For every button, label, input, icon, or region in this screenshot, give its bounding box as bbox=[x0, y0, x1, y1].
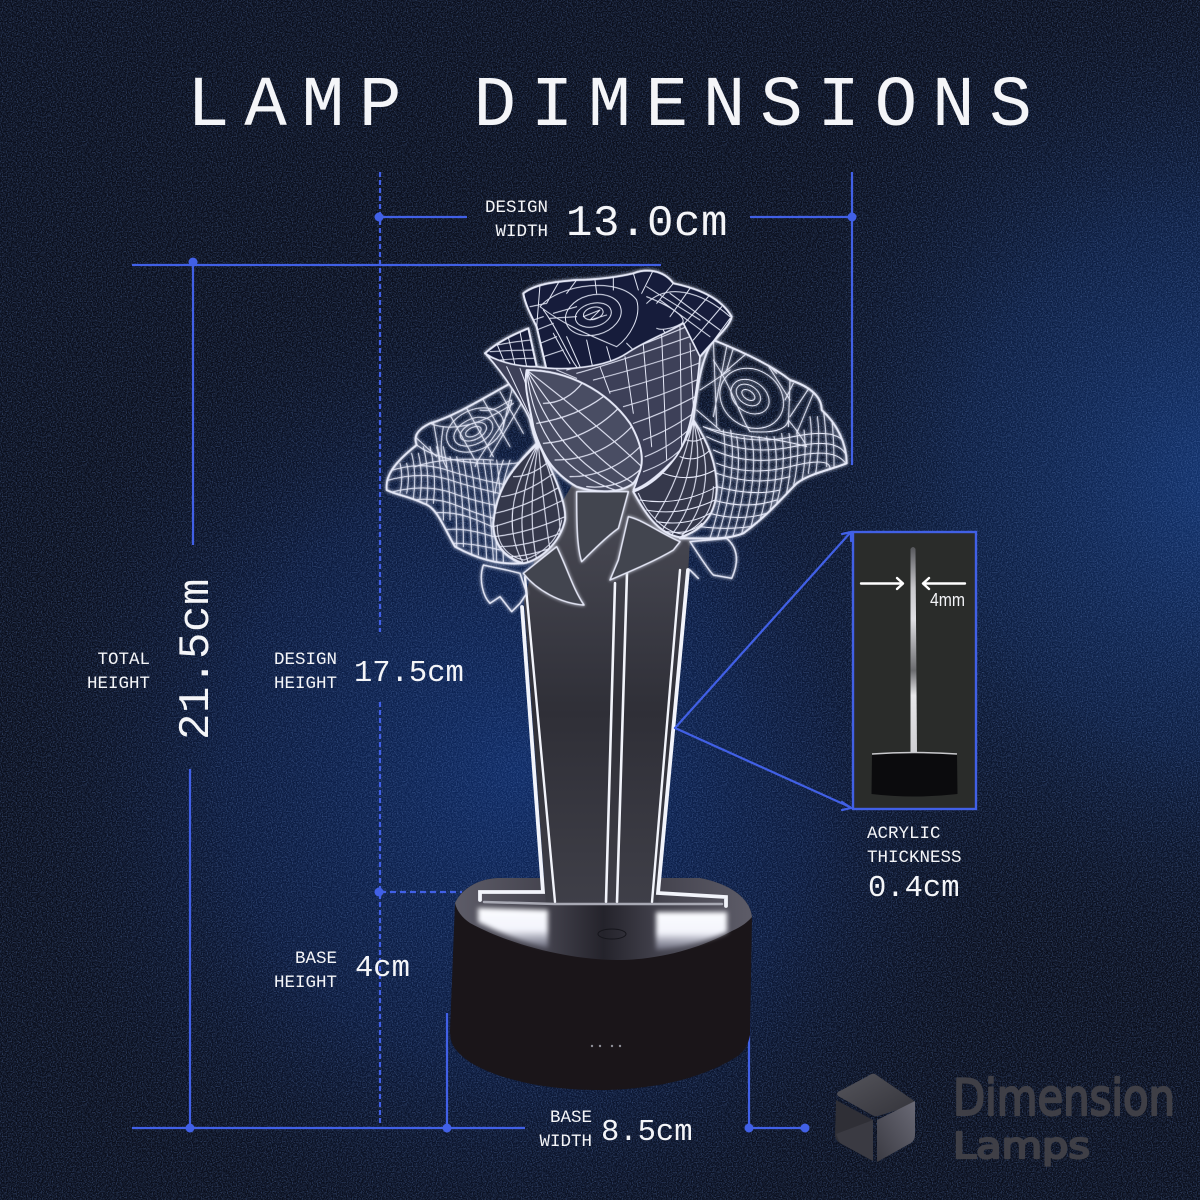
dimension label: base width: BASE bbox=[550, 1108, 592, 1128]
dimension lines bbox=[132, 172, 856, 1132]
dimension label: total height: 21.5cm bbox=[172, 578, 222, 740]
dimension label: design height bbox=[274, 650, 464, 694]
callout arrows to inset bbox=[675, 532, 851, 810]
dimension label: design width: DESIGN bbox=[485, 198, 548, 218]
dimension label: acrylic thickness: 0.4cm bbox=[868, 872, 960, 906]
logo cube icon bbox=[835, 1074, 915, 1162]
thickness value: 4mm bbox=[930, 590, 965, 610]
dimension label: design width: WIDTH bbox=[495, 222, 548, 242]
inset: acrylic side view bbox=[853, 532, 976, 809]
top rose petals bbox=[485, 270, 732, 373]
dimension label: base height: 4cm bbox=[355, 952, 410, 986]
dimension label: base width: WIDTH bbox=[539, 1132, 592, 1152]
rose cup bbox=[487, 323, 700, 490]
dimension label: design height: DESIGN bbox=[274, 650, 337, 670]
logo wordmark bbox=[953, 1069, 1175, 1167]
dimension label: base width bbox=[539, 1108, 693, 1152]
dimension label: design height: 17.5cm bbox=[354, 657, 464, 691]
dimension label: base height: BASE bbox=[295, 949, 337, 969]
lamp base bbox=[450, 878, 752, 1090]
dimension label: total height: TOTAL bbox=[97, 650, 150, 670]
right rose bbox=[680, 340, 847, 539]
dimension label: base width: 8.5cm bbox=[601, 1116, 693, 1150]
dimension label: design width bbox=[485, 198, 728, 249]
acrylic stem panel bbox=[480, 480, 726, 906]
dimension label: total height bbox=[87, 578, 222, 740]
title: LAMP DIMENSIONS bbox=[187, 67, 1047, 147]
dimension label: design height: HEIGHT bbox=[274, 674, 337, 694]
left bud bbox=[493, 443, 565, 563]
roses wireframe bbox=[383, 270, 847, 612]
left rose bbox=[383, 382, 537, 564]
dimension label: base height: HEIGHT bbox=[274, 973, 337, 993]
dimension label: acrylic thickness: ACRYLIC bbox=[867, 824, 941, 844]
thickness arrows bbox=[861, 578, 965, 589]
leaves bbox=[481, 492, 736, 612]
inset base bbox=[872, 752, 958, 796]
logo wordmark: Lamps bbox=[953, 1126, 1090, 1167]
logo: Dimension Lamps bbox=[835, 1069, 1175, 1167]
dimension label: base height bbox=[274, 949, 410, 993]
dimension label: design width: 13.0cm bbox=[566, 199, 728, 249]
central bud bbox=[526, 370, 645, 493]
dimension label: acrylic thickness: THICKNESS bbox=[867, 848, 962, 868]
lamp photo illustration bbox=[383, 270, 847, 1090]
inset acrylic sheet bbox=[910, 547, 917, 753]
right bud bbox=[633, 420, 717, 538]
dimension label: acrylic thickness bbox=[867, 824, 962, 906]
dimension label: total height: HEIGHT bbox=[87, 674, 150, 694]
